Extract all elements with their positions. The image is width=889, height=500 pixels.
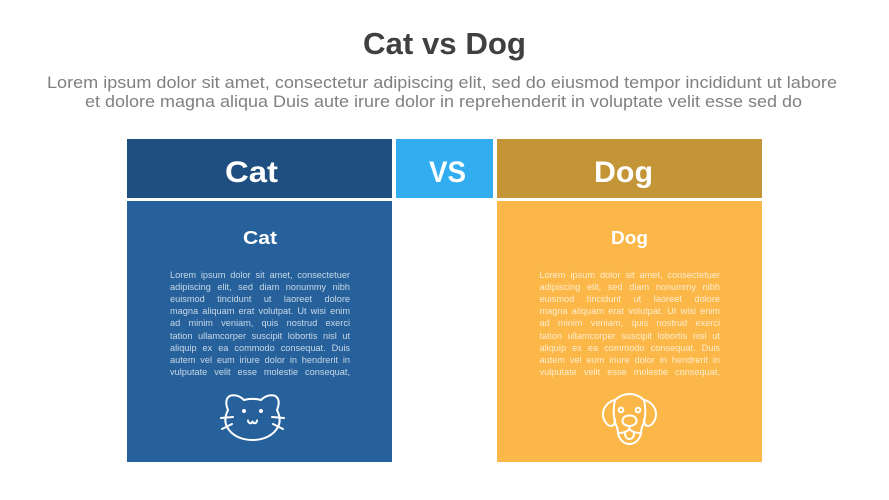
dog panel body text: magna aliquam erat volutpat. Ut wisi enim	[540, 306, 720, 316]
subtitle text: et dolore magna aliqua Duis aute irure dolor in reprehenderit in voluptate velit esse sed do	[85, 93, 802, 111]
dog panel body text: autem vel eum iriure dolor in hendrerit in	[540, 355, 720, 365]
cat panel body text: vulputate velit esse molestie consequat,	[170, 367, 350, 377]
header: Cat: Cat	[225, 156, 278, 189]
dog panel body text: tation ullamcorper suscipit lobortis nisl ut	[540, 331, 720, 341]
dog panel heading: Dog	[611, 228, 648, 248]
panel: dog	[497, 201, 762, 462]
cat panel body text: tation ullamcorper suscipit lobortis nisl ut	[170, 331, 350, 341]
dog panel body text: Lorem ipsum dolor sit amet, consectetuer	[540, 270, 720, 280]
cat panel body text: adipiscing elit, sed diam nonummy nibh	[170, 282, 350, 292]
dog panel body text: euismod tincidunt ut laoreet dolore	[540, 294, 720, 304]
dog panel body text	[540, 268, 720, 380]
cat panel body text: autem vel eum iriure dolor in hendrerit in	[170, 355, 350, 365]
dog panel body text: ad minim veniam, quis nostrud exerci	[540, 318, 720, 328]
subtitle text: Lorem ipsum dolor sit amet, consectetur adipiscing elit, sed do eiusmod tempor incididunt ut labore	[47, 74, 837, 92]
header: Dog: Dog	[594, 156, 653, 189]
cat panel body text: ad minim veniam, quis nostrud exerci	[170, 318, 350, 328]
cat panel heading: Cat	[243, 228, 277, 248]
header: VS	[396, 139, 493, 198]
header: Dog	[497, 139, 762, 198]
header: VS: VS	[429, 156, 466, 189]
cat panel body text: euismod tincidunt ut laoreet dolore	[170, 294, 350, 304]
cat panel body text: magna aliquam erat volutpat. Ut wisi enim	[170, 306, 350, 316]
subtitle text	[47, 74, 837, 111]
icon: cat face	[221, 395, 284, 440]
dog panel body text: aliquip ex ea commodo consequat. Duis	[540, 343, 720, 353]
panel: cat	[127, 201, 392, 462]
cat panel body text: aliquip ex ea commodo consequat. Duis	[170, 343, 350, 353]
cat panel body text: Lorem ipsum dolor sit amet, consectetuer	[170, 270, 350, 280]
header: Cat	[127, 139, 392, 198]
cat panel body text	[170, 268, 350, 380]
dog panel body text: vulputate velit esse molestie consequat,	[540, 367, 720, 377]
title: Cat vs Dog	[363, 26, 526, 61]
icon: dog face	[603, 394, 656, 444]
dog panel body text: adipiscing elit, sed diam nonummy nibh	[540, 282, 720, 292]
